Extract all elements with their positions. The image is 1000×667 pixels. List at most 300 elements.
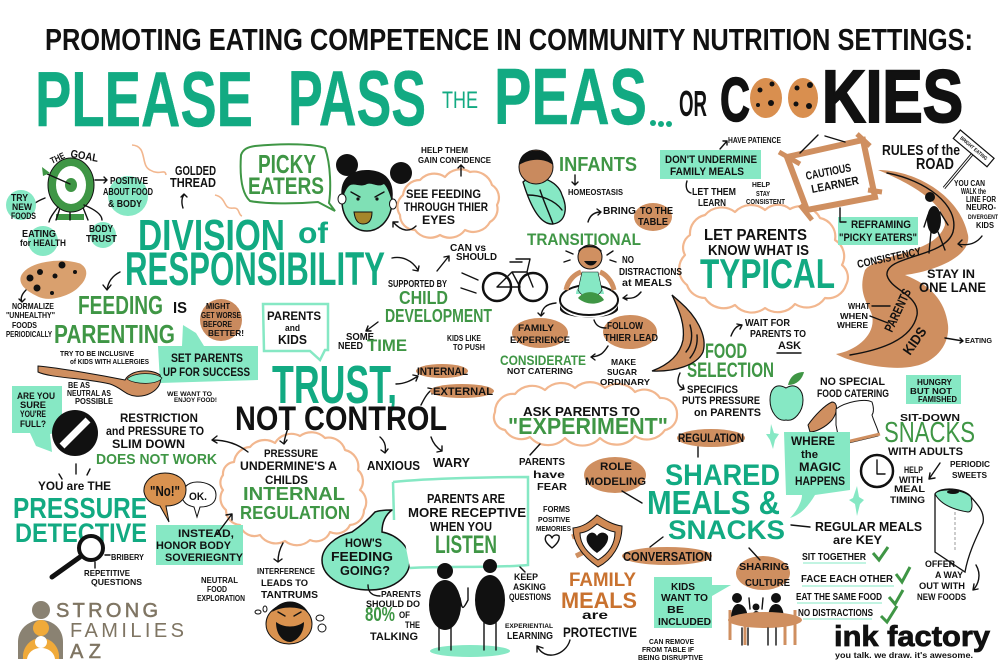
text: make sugar ordinary: MAKE [611,357,636,367]
icon: person walking on road [924,192,948,253]
heading: feeding is parenting: IS [173,300,187,317]
text: can remove from table: CAN REMOVE [649,639,694,646]
text: no distractions at meals: DISTRACTIONS [619,267,682,278]
title: please pass the peas or cookies: KIES [822,55,963,138]
text: keep asking questions: QUESTIONS [509,592,551,602]
text: restriction and pressure does not work [96,411,248,468]
text: specifics puts pressure on parents [682,384,761,419]
logo: strong families az: FAMILIES [70,620,184,642]
text: make sugar ordinary: ORDINARY [600,377,650,387]
text: normalize unhealthy foods periodically: "UNHEALTHY" [6,310,55,320]
cloud: ask parents to experiment: "EXPERIMENT" [508,413,668,439]
goal: positive about food and body: POSITIVE [110,176,148,187]
checklist: EAT THE SAME FOOD [796,592,882,603]
cloud: let parents know what is typical: TYPICAL [700,250,835,297]
logo: strong families az [18,600,184,663]
checklist [796,547,910,622]
speech bubble: are you sure you're full: SURE [20,400,46,411]
heading: sit-down snacks with adults [884,412,975,458]
heading: food selection [678,340,774,390]
speech bubble: where the magic happens: MAGIC [799,460,841,474]
text: we want to enjoy food: WE WANT TO [167,391,212,398]
speech bubble: where the magic happens: HAPPENS [795,474,845,488]
speech bubble: are you sure you're full: YOU'RE [20,409,46,420]
cloud: pressure undermines internal regulation: PRESSURE [264,448,318,460]
label: sharing culture: CULTURE [745,577,790,589]
text: parents should do 80 percent of the talking: PARENTS [381,589,421,599]
goal: positive about food and body [103,176,153,216]
icon: picture frame cautious learner: CAUTIOUS [805,162,852,183]
text: try to be inclusive: TRY TO BE INCLUSIVE [60,349,134,358]
badge: might get worse: BEFORE [203,319,232,329]
text: parents have fear: FEAR [537,481,567,493]
text: help with meal timing: MEAL [894,484,926,494]
callout: instead honor body sovereignty: INSTEAD, [178,528,234,540]
cloud: see feeding through their eyes: THROUGH THIER [404,200,488,214]
text: experiential learning [505,623,570,655]
speech bubble: are you sure you're full: FULL? [20,419,46,430]
speech bubble: how's feeding going: FEEDING [331,549,393,564]
text: neutral food exploration: NEUTRAL [201,576,238,585]
text: interference leads to tantrums: LEADS TO [261,578,308,589]
title: please pass the peas or cookies: C [720,66,750,135]
title: please pass the peas or cookies: PASS [288,54,426,142]
heading: pressure detective: YOU are THE [38,481,111,493]
text: help with meal timing [890,463,940,505]
text: offer a way out with new foods: NEW FOODS [917,592,966,603]
heading: division of responsibility: of [298,217,329,250]
callout: don't undermine family meals [660,150,761,179]
text: normalize unhealthy foods periodically: PERIODICALLY [6,329,52,339]
icon: picture frame cautious learner [779,134,882,220]
speech bubble: picky eaters: EATERS [248,173,324,200]
text: stay in one lane: STAY IN [927,267,975,281]
callout: kids want to be included: INCLUDED [658,616,711,628]
title: please pass the peas or cookies: PEAS [494,52,647,141]
text: bribery and repetitive questions: BRIBERY [111,553,145,562]
text: eating: EATING [965,336,992,345]
speech bubble: parents and kids [263,304,328,360]
the goal target [34,148,107,222]
checklist: NO DISTRACTIONS [798,608,873,619]
heading: infants [559,154,637,197]
text: regular meals are key [791,519,922,547]
cloud: let parents know what is typical [679,205,848,313]
heading: rules of the road [882,142,960,173]
callout: kids want to be included: WANT TO [661,592,708,604]
label: role modeling: ROLE [600,461,632,473]
label: follow their lead [594,315,658,349]
icon: road sign: BRIGHT EATING [958,136,988,162]
heading: family meals are protective: PROTECTIVE [563,624,637,640]
icon: girl sticking out tongue [336,154,412,231]
text: we want to enjoy food [167,391,217,404]
title: please pass the peas or cookies: THE [442,87,478,114]
text: what when where: WHEN [840,312,868,321]
label: sharing culture: SHARING [739,561,789,573]
heading: shared meals and snacks: SHARED [665,459,780,492]
heading: rules of the road: RULES of the [882,142,960,159]
icon: two parents talking [429,559,510,657]
text: forms positive memories: MEMORIES [536,526,571,533]
label: regulation [677,429,745,457]
heading: not control: NOT CONTROL [235,400,447,438]
goal: eating for health: for HEALTH [20,238,66,248]
text: supported by child development: DEVELOPMENT [385,306,492,326]
cloud: pressure undermines internal regulation: CHILDS [265,475,308,487]
text: anxious and wary: ANXIOUS [367,458,420,473]
text: forms positive memories [536,505,571,548]
text: forms positive memories: FORMS [543,505,571,514]
title: please pass the peas or cookies: OR [679,83,707,124]
label: bring to the table: BRING [603,205,636,217]
text: wait for parents to ask [731,318,806,353]
text: offer a way out with new foods: A WAY [935,570,964,581]
label: conversation: CONVERSATION [623,550,712,564]
text: interference leads to tantrums: TANTRUMS [261,589,318,601]
text: periodic sweets [950,460,990,480]
heading: feeding is parenting: FEEDING [78,290,163,320]
text: help them gain confidence [418,145,491,176]
speech bubbles: no and ok: "No!" [150,483,180,500]
text: consistency: CONSISTENCY [856,246,923,271]
cloud: see feeding through their eyes [393,169,499,238]
callout: kids want to be included: BE [667,604,684,616]
callout: instead honor body sovereignty [156,514,244,565]
text: have patience: HAVE PATIENCE [728,136,782,145]
text: you can walk the line: KIDS [976,221,995,230]
text: make sugar ordinary: SUGAR [607,367,637,377]
text: stay in one lane: ONE LANE [919,280,986,295]
callout: reframing picky eaters [838,208,918,245]
text: regular meals are key: REGULAR MEALS [815,519,922,534]
label: conversation [622,537,712,565]
text: be as neutral as possible [67,381,114,406]
text: keep asking questions: KEEP [514,572,538,582]
speech bubble: parents are more receptive when you listen: WHEN YOU [430,519,492,534]
callout: set parents up for success: SET PARENTS [171,353,243,365]
callout: hungry but not famished: FAMISHED [918,394,957,404]
text: help stay consistent: HELP [752,180,770,189]
text: what when where [837,302,890,330]
text: help stay consistent [746,180,785,206]
callout: hungry but not famished: BUT NOT [910,386,953,396]
goal: try new foods [6,190,36,221]
text: experiential learning: EXPERIENTIAL [505,623,553,630]
speech bubble: parents and kids: and [285,323,300,333]
text: supported by child development: CHILD [399,288,448,308]
cloud: pressure undermines internal regulation [220,428,366,545]
heading: pressure detective: DETECTIVE [15,518,147,548]
text: offer a way out with new foods [917,559,966,603]
text: can remove from table: BEING DISRUPTIVE [638,655,703,662]
label: role modeling: MODELING [585,476,646,488]
heading: sit-down snacks with adults: SNACKS [884,417,975,449]
label: follow their lead: FOLLOW [607,321,643,332]
golden thread [132,145,242,216]
text: make sugar ordinary [600,357,650,387]
text: you can walk the line [954,179,998,247]
speech bubble: how's feeding going [322,510,410,590]
text: can remove from table: FROM TABLE IF [642,647,695,654]
badge: might get worse: GET WORSE [201,310,241,320]
the goal target: GOAL [69,148,99,165]
text: help with meal timing: WITH [899,475,923,485]
text: parents should do 80 percent of the talking: SHOULD DO [366,599,420,610]
text: periodic sweets: PERIODIC [950,460,990,469]
label: external: EXTERNAL [433,386,493,398]
text: parents have fear: have [533,469,565,481]
heading: shared meals and snacks: SNACKS [668,515,785,545]
label: internal: INTERNAL [417,366,468,378]
callout: instead honor body sovereignty: HONOR BODY [156,540,232,552]
text: no distractions at meals: NO [622,255,634,266]
text: we want to enjoy food: ENJOY FOOD! [174,397,217,404]
icon: bicycle [461,259,547,301]
heading: shared meals and snacks [647,459,785,545]
text: anxious and wary: WARY [433,455,470,470]
icon: clock [861,455,893,487]
text: supported by child development [385,279,492,352]
callout: reframing picky eaters: "PICKY EATERS" [839,232,917,244]
heading: feeding is parenting: PARENTING [54,319,175,349]
text: neutral food exploration: FOOD [207,585,227,594]
heading: infants: INFANTS [559,154,637,176]
cloud: see feeding through their eyes: EYES [422,213,455,227]
text: help them gain confidence: HELP THEM [421,145,468,155]
text: some need time: TIME [367,336,407,355]
label: family experience: EXPERIENCE [510,335,570,346]
logo: ink factory: you talk. we draw. it's awesome. [835,650,973,660]
text: can remove from table [638,639,703,662]
speech bubble: where the magic happens [766,424,864,518]
icon: spoon with peas [38,366,162,396]
title: please pass the peas or cookies: PLEASE [35,55,253,143]
goal: try new foods: NEW [12,202,32,212]
text: supported by child development: TO PUSH [453,343,485,352]
text: supported by child development: SUPPORTED BY [388,279,447,290]
text: normalize unhealthy foods periodically: FOODS [12,320,37,330]
text: normalize unhealthy foods periodically [6,301,55,339]
text: bribery and repetitive questions: QUESTIONS [91,577,142,587]
icon: shield with heart [572,515,622,567]
text: eating [945,336,992,345]
text: try to be inclusive: of KIDS WITH ALLERGIES [70,357,149,366]
text: wait for parents to ask: ASK [778,340,801,352]
callout: kids want to be included: KIDS [671,581,695,593]
speech bubble: where the magic happens: the [801,449,818,461]
text: parents should do 80 percent of the talking: TALKING [370,631,418,643]
heading: feeding is parenting [54,290,187,349]
icon: crying toddler face [255,602,326,644]
callout: hungry but not famished: HUNGRY [917,377,952,387]
heading: pressure detective [13,464,147,548]
speech bubbles: no and ok: OK. [189,491,207,503]
callout: don't undermine family meals: DON'T UNDERMINE [665,154,757,166]
text: experiential learning: LEARNING [507,631,553,642]
heading: infants: HOMEOSTASIS [568,188,624,197]
text: be as neutral as possible: NEUTRAL AS [67,389,112,398]
icon: paper towel roll [935,489,983,590]
text: help them gain confidence: GAIN CONFIDENCE [418,155,491,165]
label: regulation: REGULATION [678,431,744,445]
text: have patience [720,136,782,149]
heading: division of responsibility: RESPONSIBILITY [125,242,385,295]
label: family experience [510,303,570,348]
speech bubble: where the magic happens: WHERE [791,434,835,448]
text: specifics puts pressure on parents: SPECIFICS [687,384,738,396]
text: help with meal timing: TIMING [890,495,925,505]
text: considerate not catering: CONSIDERATE [500,352,586,368]
text: periodic sweets: SWEETS [952,471,988,480]
label: role modeling [584,457,646,503]
text: neutral food exploration [197,576,245,603]
callout: don't undermine family meals: FAMILY MEALS [670,166,744,178]
text: let them learn: LEARN [698,198,726,209]
golden thread: GOLDED [175,163,216,178]
text: bribery and repetitive questions [84,553,145,587]
heading: family meals are protective [561,570,637,640]
text: help stay consistent: STAY [756,189,770,198]
speech bubble: picky eaters [241,144,335,211]
icon: baby in highchair [560,245,618,318]
icon: winding road: KIDS [899,324,930,358]
text: keep asking questions [509,567,551,602]
text: some need time: SOME [346,332,374,343]
label: follow their lead: THIER LEAD [604,333,658,344]
icon: winding road [836,170,968,368]
text: considerate not catering [500,346,608,376]
text: no special food catering: FOOD CATERING [817,388,889,400]
text: specifics puts pressure on parents: PUTS PRESSURE [682,395,760,407]
callout: instead honor body sovereignty: SOVERIEGNTY [165,552,244,564]
text: no distractions at meals [619,255,682,300]
heading: family meals are protective: MEALS [561,588,637,613]
text: wait for parents to ask: PARENTS TO [750,329,806,340]
icon: picture frame cautious learner: LEARNER [810,175,860,196]
text: restriction and pressure does not work: RESTRICTION [120,411,198,425]
heading: trust: TRUST, [272,355,397,415]
text: keep asking questions: ASKING [513,582,546,592]
text: normalize unhealthy foods periodically: NORMALIZE [12,301,54,311]
text: parents should do 80 percent of the talking [365,585,421,643]
text: be as neutral as possible: BE AS [68,381,91,390]
text: can vs should: SHOULD [456,252,497,263]
heading: food selection: SELECTION [687,359,774,382]
icon: cookie [19,261,86,302]
text: you can walk the line: YOU CAN [954,179,985,188]
label: family experience: FAMILY [518,323,555,334]
icon: road sign [944,130,994,188]
badge: might get worse: BETTER! [208,328,244,338]
heading: transitional: TRANSITIONAL [527,230,641,249]
callout: set parents up for success: UP FOR SUCCESS [163,367,250,379]
goal: try new foods: TRY [11,193,28,204]
logo: strong families az: AZ [70,641,101,663]
label: sharing culture [736,548,790,590]
speech bubble: are you sure you're full: ARE YOU [17,391,55,402]
text: anxious and wary [367,437,470,473]
text: restriction and pressure does not work: and PRESSURE TO [106,424,204,438]
speech bubble: parents are more receptive when you listen: MORE RECEPTIVE [408,505,526,520]
icon: banana [652,295,704,371]
goal: positive about food and body: & BODY [108,199,142,210]
text: offer a way out with new foods: OUT WITH [919,581,965,592]
text: considerate not catering: NOT CATERING [507,367,573,376]
heading: rules of the road: ROAD [916,156,954,173]
speech bubble: parents and kids: KIDS [278,332,307,347]
callout: reframing picky eaters: REFRAMING [851,219,911,231]
speech bubble: parents are more receptive when you listen: LISTEN [435,531,497,559]
golden thread: THREAD [170,175,216,190]
text: try to be inclusive [60,349,149,366]
text: neutral food exploration: EXPLORATION [197,594,245,603]
text: what when where: WHERE [837,321,869,330]
speech bubble: parents are more receptive when you listen: PARENTS ARE [427,491,505,506]
text: forms positive memories: POSITIVE [538,515,570,524]
icon: apple [770,372,804,420]
icon: family at table [728,593,802,645]
heading: family meals are protective: FAMILY [569,570,636,591]
text: can vs should: CAN vs [450,243,486,254]
title: please pass the peas or cookies [35,52,963,143]
heading: pressure detective: PRESSURE [13,493,147,525]
text: offer a way out with new foods: OFFER [925,559,955,570]
cloud: pressure undermines internal regulation: INTERNAL [243,484,345,504]
cloud: pressure undermines internal regulation: REGULATION [240,503,350,523]
goal: try new foods: FOODS [11,211,36,221]
text: some need time [338,322,407,355]
logo: strong families az: STRONG [56,600,158,622]
text: specifics puts pressure on parents: on PARENTS [694,407,761,419]
cloud: see feeding through their eyes: SEE FEEDING [406,187,481,201]
label: bring to the table: TABLE [638,216,668,228]
callout: hungry but not famished [906,375,961,404]
heading: sit-down snacks with adults: WITH ADULTS [888,446,963,458]
speech bubble: are you sure you're full [12,386,62,452]
text: restriction and pressure does not work: SLIM DOWN [112,437,185,451]
text: stay in one lane [919,267,986,295]
goal: body trust: BODY [89,224,113,235]
goal: body trust [86,222,117,248]
speech bubbles: no and ok [144,473,216,522]
text: interference leads to tantrums: INTERFERENCE [257,566,315,576]
cloud: pressure undermines internal regulation: UNDERMINE'S A [240,461,337,473]
text: can vs should [437,243,497,271]
text: interference leads to tantrums [257,543,318,601]
icon: swaddled baby [519,150,565,224]
goal: eating for health: EATING [22,229,56,240]
text: parents should do 80 percent of the talking: 80% [365,604,395,626]
callout: kids want to be included [654,577,731,628]
text: you can walk the line: NEURO- [966,203,996,212]
heading: food selection: FOOD [705,340,747,363]
badge: might get worse [200,299,244,341]
heading: sit-down snacks with adults: SIT-DOWN [900,412,960,424]
text: no distractions at meals: at MEALS [622,278,672,289]
logo: ink factory: ink factory [834,621,990,653]
speech bubble: parents and kids: PARENTS [267,309,321,323]
text: be as neutral as possible: POSSIBLE [75,397,114,406]
callout: set parents up for success [158,325,258,383]
text: no special food catering: NO SPECIAL [820,376,885,388]
checklist: FACE EACH OTHER [801,574,894,585]
text: you can walk the line: WALK the [961,187,986,196]
heading: shared meals and snacks: MEALS & [647,484,780,521]
text: supported by child development: KIDS LIKE [447,334,482,343]
goal: eating for health [20,226,66,256]
text: let them learn [686,181,736,209]
